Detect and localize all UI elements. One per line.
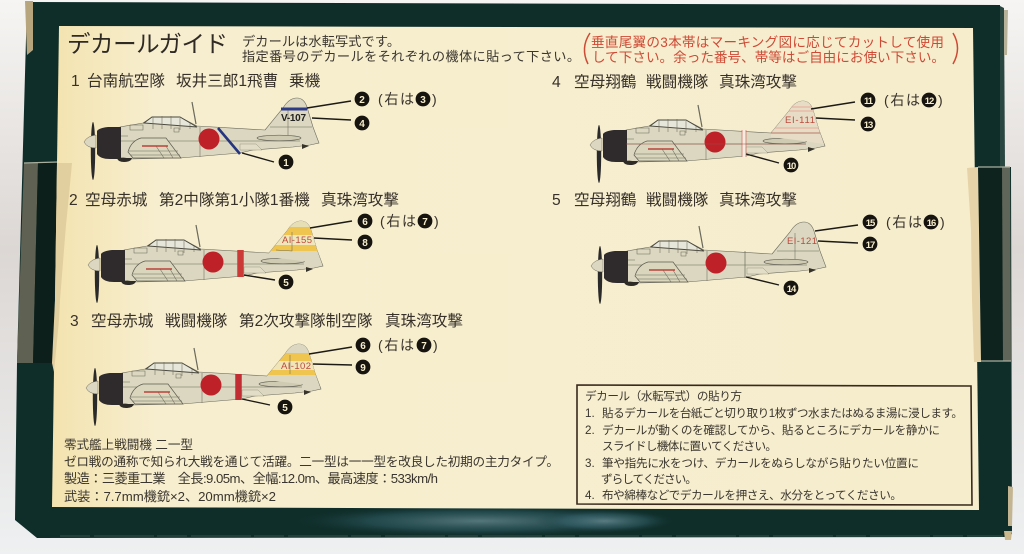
aircraft 4 heading: 戦闘機隊 bbox=[646, 73, 709, 91]
aircraft 2 callouts: 6 bbox=[362, 217, 368, 228]
aircraft 2 callouts: 5 bbox=[283, 278, 289, 289]
intro text bbox=[242, 33, 580, 64]
aircraft 3 callouts: 9 bbox=[360, 363, 366, 374]
cream instruction panel bbox=[52, 26, 979, 510]
aircraft 5 illustration: EI-121 bbox=[787, 236, 817, 247]
aircraft 2 illustration bbox=[88, 219, 326, 303]
aircraft 3 heading: 空母赤城 bbox=[91, 312, 154, 330]
aircraft 3 callouts: ) bbox=[433, 337, 438, 353]
aircraft 5 callouts: 14 bbox=[787, 284, 797, 295]
panel: how to apply decals: 貼るデカールを台紙ごと切り取り1枚ずつ水またはぬるま湯に浸します。 bbox=[602, 406, 963, 420]
title: デカールガイド bbox=[67, 31, 228, 57]
aircraft 4 callouts: 12 bbox=[925, 96, 934, 107]
aircraft 4 illustration: EI-111 bbox=[785, 115, 815, 126]
aircraft 5 heading: 5 bbox=[552, 192, 561, 209]
aircraft 2 heading: 真珠湾攻撃 bbox=[321, 191, 399, 209]
aircraft 2 callouts: 7 bbox=[422, 217, 428, 228]
panel: how to apply decals bbox=[577, 385, 972, 505]
panel: how to apply decals: 2. bbox=[585, 424, 595, 437]
panel: how to apply decals: 4. bbox=[585, 489, 595, 502]
aircraft 3 callouts: 5 bbox=[282, 403, 288, 414]
aircraft 2 callouts: ) bbox=[434, 213, 439, 229]
aircraft 1 callouts: ) bbox=[432, 91, 437, 107]
aircraft 1 heading: 乗機 bbox=[289, 72, 321, 90]
aircraft 5 heading: 戦闘機隊 bbox=[646, 191, 709, 209]
aircraft 4 callouts: ) bbox=[938, 92, 943, 108]
panel: how to apply decals: 筆や指先に水をつけ、デカールをぬらしながら貼りたい位置に bbox=[602, 456, 919, 470]
aircraft 2 heading: 空母赤城 bbox=[85, 191, 148, 209]
red note: して下さい。余った番号、帯等はご自由にお使い下さい。 bbox=[592, 49, 945, 65]
panel: how to apply decals: 3. bbox=[585, 457, 595, 470]
panel: how to apply decals: デカールが動くのを確認してから、貼るところにデカールを静かに bbox=[602, 423, 940, 437]
aircraft 3 callouts bbox=[242, 337, 438, 414]
aircraft 1 heading: 坂井三郎1飛曹 bbox=[176, 72, 278, 90]
aircraft 2 illustration: AI-155 bbox=[282, 235, 312, 246]
aircraft 1 callouts bbox=[242, 91, 437, 169]
panel: how to apply decals: 布や綿棒などでデカールを押さえ、水分をとってください。 bbox=[602, 488, 902, 502]
aircraft 4 illustration bbox=[590, 99, 828, 183]
aircraft 1 illustration bbox=[84, 98, 319, 180]
aircraft 5 callouts: 16 bbox=[927, 218, 936, 229]
aircraft 3 heading: 3 bbox=[70, 313, 79, 330]
panel: how to apply decals: デカール（水転写式）の貼り方 bbox=[585, 389, 742, 403]
aircraft 2 callouts: 8 bbox=[362, 238, 368, 249]
aircraft 1 callouts: 2 bbox=[359, 95, 365, 106]
aircraft 2 callouts bbox=[244, 213, 439, 289]
aircraft 2 heading: 2 bbox=[69, 192, 78, 209]
panel: how to apply decals: ずらしてください。 bbox=[601, 473, 697, 486]
aircraft 4 callouts: 11 bbox=[864, 96, 874, 107]
aircraft 5 illustration bbox=[591, 222, 826, 304]
aircraft 1 heading: 台南航空隊 bbox=[87, 72, 165, 90]
aircraft 1 heading: 1 bbox=[71, 73, 80, 90]
red note bbox=[584, 33, 958, 65]
aircraft 2 heading: 第2中隊第1小隊1番機 bbox=[159, 191, 310, 209]
aircraft 1 callouts: (右は bbox=[378, 91, 414, 107]
aircraft 2 callouts: (右は bbox=[380, 213, 416, 229]
aircraft 4 heading: 空母翔鶴 bbox=[574, 73, 636, 91]
left torn paper edge bbox=[52, 163, 72, 372]
aircraft 3 heading: 第2次攻撃隊制空隊 bbox=[239, 312, 373, 330]
aircraft specification text: 製造：三菱重工業 全長:9.05m、全幅:12.0m、最高速度：533km/h bbox=[64, 470, 438, 486]
aircraft 3 illustration bbox=[86, 342, 324, 426]
aircraft 3 callouts: 6 bbox=[360, 341, 366, 352]
intro text: デカールは水転写式です。 bbox=[242, 33, 400, 49]
aircraft 4 callouts: 13 bbox=[864, 120, 873, 131]
aircraft specification text: 武装：7.7mm機銃×2、20mm機銃×2 bbox=[64, 489, 276, 504]
aircraft 4 heading: 真珠湾攻撃 bbox=[719, 73, 797, 91]
aircraft 5 callouts bbox=[746, 214, 945, 295]
red note: 垂直尾翼の3本帯はマーキング図に応じてカットして使用 bbox=[591, 34, 944, 50]
aircraft 5 callouts: (右は bbox=[886, 214, 922, 230]
right torn paper edge bbox=[967, 167, 981, 362]
aircraft 4 heading: 4 bbox=[552, 74, 561, 91]
aircraft 5 heading: 空母翔鶴 bbox=[574, 191, 636, 209]
aircraft 3 callouts: 7 bbox=[421, 341, 427, 352]
aircraft specification text: ゼロ戦の通称で知られ大戦を通じて活躍。二一型は一一型を改良した初期の主力タイプ。 bbox=[64, 454, 559, 469]
aircraft 1 callouts: 3 bbox=[420, 95, 426, 106]
aircraft specification text bbox=[64, 437, 559, 504]
aircraft 5 callouts: 17 bbox=[866, 240, 875, 251]
aircraft 3 heading: 真珠湾攻撃 bbox=[385, 312, 463, 330]
aircraft 5 callouts: 15 bbox=[866, 218, 876, 229]
panel: how to apply decals: スライドし機体に置いてください。 bbox=[602, 439, 777, 453]
aircraft 4 callouts bbox=[746, 92, 943, 172]
panel: how to apply decals: 1. bbox=[585, 407, 595, 420]
aircraft 1 illustration: V-107 bbox=[281, 113, 306, 124]
aircraft specification text: 零式艦上戦闘機 二一型 bbox=[64, 437, 193, 452]
aircraft 3 heading: 戦闘機隊 bbox=[165, 312, 228, 330]
aircraft 5 heading: 真珠湾攻撃 bbox=[719, 191, 797, 209]
aircraft 5 callouts: ) bbox=[940, 214, 945, 230]
aircraft 4 callouts: 10 bbox=[787, 161, 796, 172]
aircraft 3 callouts: (右は bbox=[378, 337, 414, 353]
aircraft 3 illustration: AI-102 bbox=[281, 361, 311, 372]
aircraft 1 callouts: 1 bbox=[283, 158, 289, 169]
aircraft 4 callouts: (右は bbox=[884, 92, 920, 108]
intro text: 指定番号のデカールをそれぞれの機体に貼って下さい。 bbox=[242, 48, 580, 64]
aircraft 1 callouts: 4 bbox=[359, 119, 365, 130]
